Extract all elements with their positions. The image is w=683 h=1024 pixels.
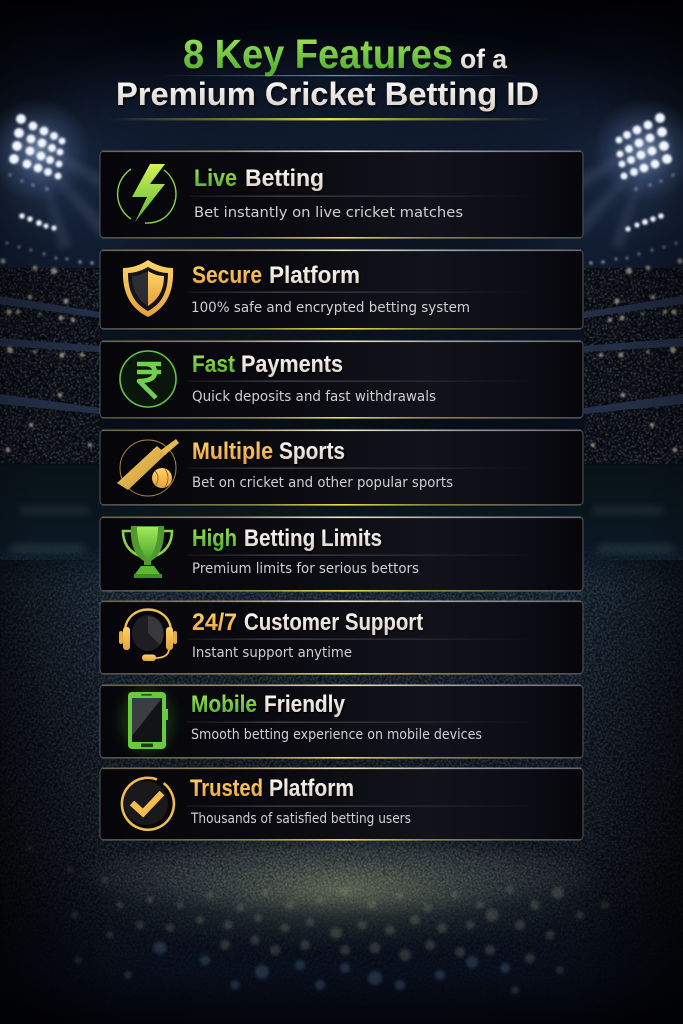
icon: trophy	[123, 526, 172, 578]
edge darkening	[0, 560, 110, 1024]
bokeh: blue band	[74, 942, 564, 994]
text: 24/7 Customer Support description: Instant support anytime	[192, 645, 352, 661]
icon: lightning bolt	[118, 164, 176, 223]
panel: Trusted Platform	[100, 768, 583, 841]
heading: Live Betting: Betting	[245, 165, 324, 192]
heading: Mobile Friendly: Friendly	[264, 691, 346, 718]
heading: 24/7 Customer Support: 24/7	[192, 609, 237, 636]
heading: Multiple Sports: Sports	[279, 438, 345, 465]
title rules	[110, 75, 550, 120]
heading: High Betting Limits: Betting Limits	[244, 525, 382, 552]
text: Secure Platform description: 100% safe and encrypted betting system	[191, 300, 470, 316]
panel: Secure Platform	[100, 250, 583, 330]
ground stripes	[10, 508, 673, 552]
panel: Mobile Friendly	[100, 684, 583, 759]
panel: 24/7 Customer Support	[100, 600, 583, 675]
title	[116, 31, 539, 112]
panel: Live Betting	[100, 150, 583, 239]
heading: Trusted Platform: Platform	[269, 775, 354, 802]
text: Multiple Sports description: Bet on cricket and other popular sports	[192, 475, 453, 491]
text: High Betting Limits description: Premium limits for serious bettors	[192, 561, 419, 577]
title: Premium Cricket Betting ID	[116, 76, 539, 112]
icon: headset	[119, 610, 177, 661]
heading: High Betting Limits: High	[192, 525, 237, 552]
panel: Multiple Sports	[100, 430, 583, 506]
heading: Mobile Friendly	[191, 691, 346, 718]
text: Trusted Platform description: Thousands of satisfied betting users	[190, 811, 411, 827]
heading: Trusted Platform: Trusted	[190, 775, 263, 802]
heading: Fast Payments: Payments	[241, 351, 343, 378]
heading: Fast Payments	[192, 351, 343, 378]
heading: Fast Payments: Fast	[192, 351, 235, 378]
icon: rupee coin	[120, 351, 176, 407]
heading: Secure Platform	[192, 262, 360, 289]
icon: cricket bat and ball	[117, 439, 179, 496]
heading: Live Betting: Live	[194, 165, 237, 192]
text: Mobile Friendly description: Smooth betting experience on mobile devices	[191, 727, 482, 743]
panel: Fast Payments	[100, 340, 583, 419]
heading: Secure Platform: Secure	[192, 262, 262, 289]
floodlights: left	[0, 98, 110, 250]
floodlights: right	[573, 98, 683, 250]
heading: 24/7 Customer Support: Customer Support	[244, 609, 423, 636]
icon: check badge	[122, 778, 174, 830]
title: 8 Key Features	[183, 31, 453, 77]
title: of a	[460, 44, 508, 74]
heading: Multiple Sports: Multiple	[192, 438, 273, 465]
text: Fast Payments description: Quick deposits and fast withdrawals	[192, 389, 436, 405]
icon: mobile phone	[121, 688, 173, 752]
heading: Multiple Sports	[192, 438, 345, 465]
panel: High Betting Limits	[100, 516, 583, 592]
stands right	[584, 173, 683, 464]
icon: shield	[123, 260, 173, 317]
text: Live Betting description: Bet instantly on live cricket matches	[194, 205, 463, 221]
heading: Secure Platform: Platform	[269, 262, 360, 289]
heading: Mobile Friendly: Mobile	[191, 691, 257, 718]
stands left	[0, 173, 100, 464]
bokeh: olive band	[26, 844, 609, 963]
heading: High Betting Limits	[192, 525, 382, 552]
heading: Trusted Platform	[190, 775, 354, 802]
heading: 24/7 Customer Support	[192, 609, 423, 636]
heading: Live Betting	[194, 165, 324, 192]
